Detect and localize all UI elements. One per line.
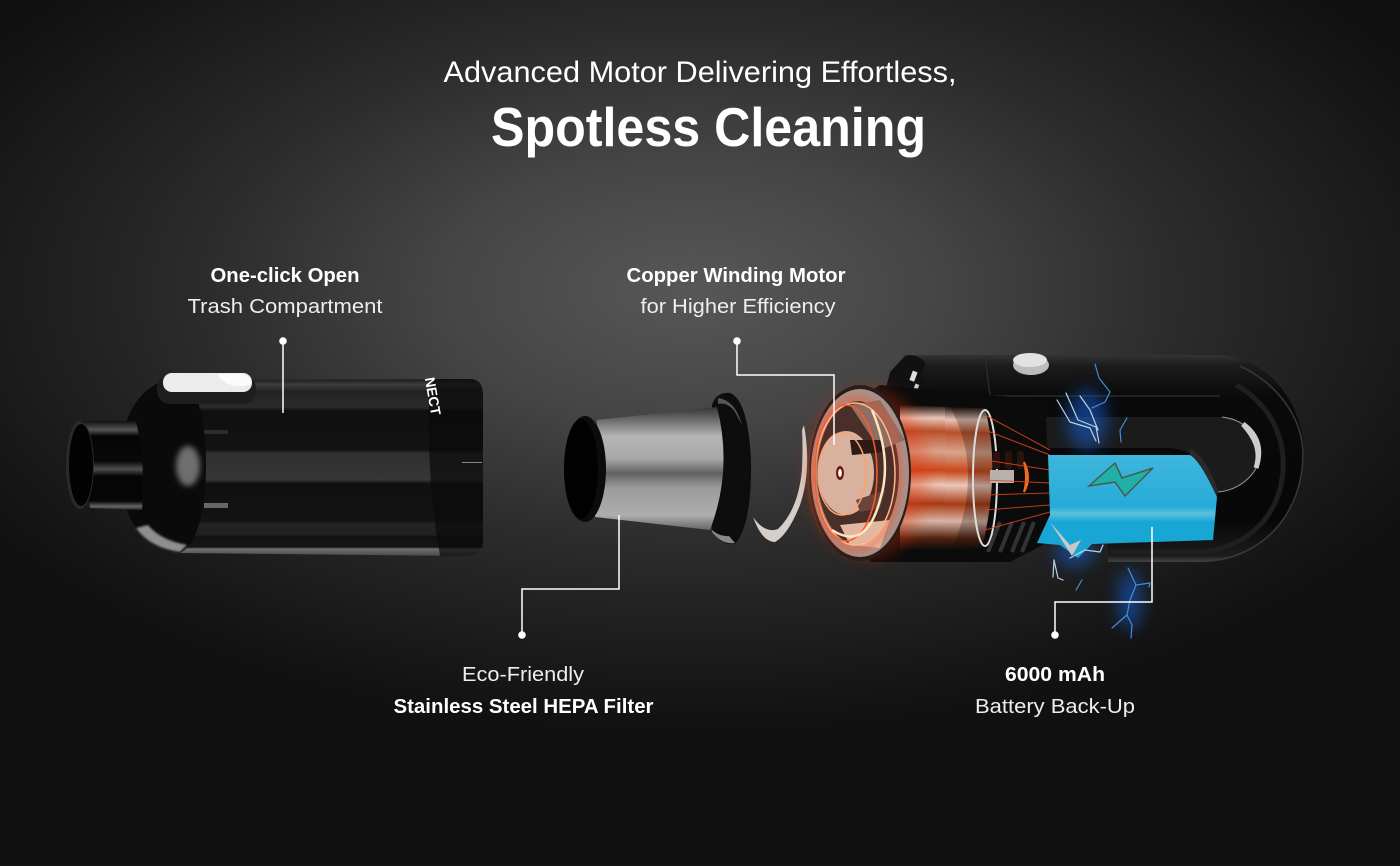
filter opening — [564, 416, 606, 522]
label: copper motor: Copper Winding Motor — [626, 265, 846, 287]
crescent seal — [753, 425, 807, 542]
label: battery — [975, 664, 1135, 718]
title — [444, 56, 956, 158]
battery pack — [1037, 455, 1217, 558]
side clip — [885, 355, 925, 402]
battery with lightning — [1037, 364, 1218, 638]
label: filter — [394, 664, 654, 718]
callout lines — [283, 341, 1152, 635]
title: Advanced Motor Delivering Effortless, — [444, 56, 956, 89]
label: battery: Battery Back-Up — [975, 696, 1135, 718]
callout dots — [279, 337, 1059, 639]
fan head — [808, 388, 928, 558]
nozzle — [79, 421, 143, 510]
label: filter: Eco-Friendly — [462, 664, 584, 686]
label: filter: Stainless Steel HEPA Filter — [394, 696, 654, 718]
motor — [808, 385, 1052, 562]
leader: filter — [522, 515, 619, 635]
filter product — [564, 393, 751, 544]
vacuum handle — [885, 353, 1304, 562]
label: trash compartment: One-click Open — [210, 265, 360, 287]
vent slots — [993, 451, 1024, 469]
copper winding — [900, 405, 968, 550]
shaft — [990, 470, 1014, 483]
handle shell — [900, 355, 1304, 562]
open button — [157, 375, 256, 404]
power button — [1013, 355, 1049, 375]
flange dome — [120, 380, 206, 553]
motor housing — [860, 385, 1052, 562]
title: Spotless Cleaning — [491, 96, 926, 158]
leader: copper motor — [737, 341, 834, 445]
brand mark: NECT — [422, 376, 444, 417]
leader: trash compartment — [282, 341, 284, 413]
label: copper motor — [626, 265, 846, 318]
filter flange — [712, 393, 751, 544]
label: copper motor: for Higher Efficiency — [640, 296, 836, 318]
label: battery: 6000 mAh — [1005, 664, 1105, 686]
label: trash compartment — [188, 265, 383, 318]
steel mesh cone — [595, 407, 724, 530]
battery bolt icon — [1089, 463, 1153, 496]
lightning arcs — [1053, 364, 1150, 638]
label: trash compartment: Trash Compartment — [188, 296, 383, 318]
blue glow — [1055, 390, 1142, 630]
handle cutout — [1040, 417, 1260, 492]
trash compartment product — [66, 373, 483, 556]
glowing rings — [812, 398, 900, 550]
leader: battery — [1055, 527, 1152, 635]
cracked shard — [1050, 522, 1081, 556]
cylinder body — [180, 379, 483, 556]
red speed lines — [985, 415, 1050, 530]
